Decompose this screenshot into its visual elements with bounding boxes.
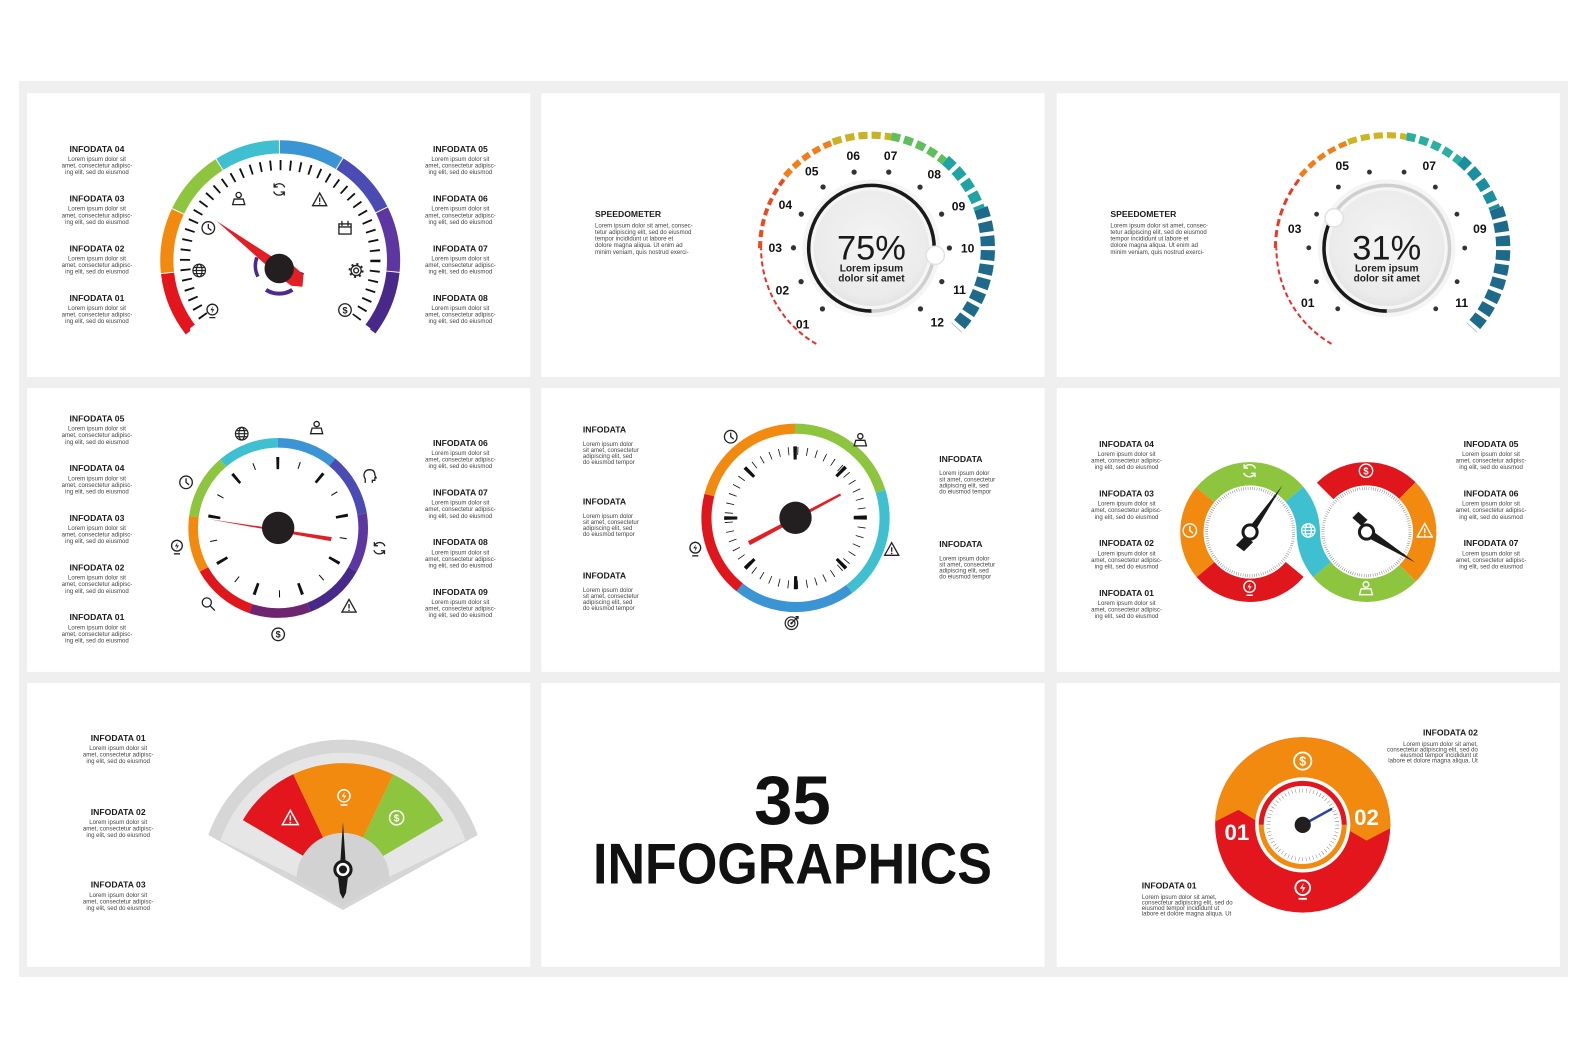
text: infodata 04: ing elit, sed do eiusmod [65,489,129,495]
text: infodata 08: Lorem ipsum dolor sit [431,550,490,556]
text: speedometer description: minim veniam, quis nostrud exerci- [595,250,689,256]
text: infodata 02: INFODATA 02 [70,563,125,573]
text: infodata 03: Lorem ipsum dolor sit [68,526,126,532]
text: infodata left 2: do eiusmod tempor [583,532,635,538]
text: infodata 03: INFODATA 03 [1099,489,1154,499]
text: infodata 01: ing elit, sed do eiusmod [86,759,150,765]
text: infodata right 1: do eiusmod tempor [939,489,991,495]
text: infodata 02: ing elit, sed do eiusmod [86,833,150,839]
text: infodata 01: eiusmod tempor incididunt ut [1142,906,1220,912]
text: infodata 08: Lorem ipsum dolor sit [431,306,490,312]
text: infodata 01: INFODATA 01 [70,293,125,303]
text: infodata 02: Lorem ipsum dolor sit [68,576,126,582]
text: infodata 02: INFODATA 02 [1423,728,1478,738]
text: infodata 08: ing elit, sed do eiusmod [429,563,492,569]
panel: title 35 infographics [541,683,1045,967]
text: infodata left 3: adipiscing elit, sed [583,600,632,606]
text: speedometer description: tetur adipiscing elit, sed do eiusmod [595,230,691,236]
text: infodata right 1: INFODATA [939,454,982,464]
dashed gradient arc [760,135,988,344]
text: infodata 06: amet, consectetur adipisc- [1456,508,1526,514]
text: infodata 05: ing elit, sed do eiusmod [1459,465,1523,471]
text: infodata 06: Lorem ipsum dolor sit [431,207,490,213]
text: infodata left 1 [583,425,639,466]
text: infodata 01: consectetur adipiscing elit, sed do [1142,900,1233,906]
panel: speedometer 31% [1057,93,1560,377]
text: infodata 01: Lorem ipsum dolor sit amet, [1142,895,1217,901]
text: speedometer description [595,209,693,256]
text: infodata 08: INFODATA 08 [433,293,488,303]
dial numbers: 03 [1288,222,1302,236]
text: speedometer description: Lorem ipsum dolor sit amet, consec- [1110,223,1208,229]
text: infodata 01 [83,733,154,765]
text: infodata left 3: do eiusmod tempor [583,606,635,612]
gauge ring [193,443,363,613]
fan gauge body [208,740,478,961]
panel: two-part circle gauge [1057,683,1560,967]
needle [216,221,303,294]
text: infodata 08: amet, consectetur adipisc- [425,313,496,319]
text: infodata right 1 [939,454,995,495]
text: infodata 07: amet, consectetur adipisc- [425,263,496,269]
text: infodata 05: Lorem ipsum dolor sit [431,157,490,163]
dial numbers [1288,159,1487,310]
text: infodata 01: ing elit, sed do eiusmod [1095,614,1158,620]
text: infodata 04: Lorem ipsum dolor sit [68,476,126,482]
panel: speedometer 75% [541,93,1045,377]
text: infodata 03: INFODATA 03 [91,880,146,890]
text: infodata 04: ing elit, sed do eiusmod [1095,465,1158,471]
text: infodata 05: Lorem ipsum dolor sit [1462,452,1520,458]
text: infodata 02 [1387,728,1478,765]
text: infodata 04 [62,144,132,176]
dial numbers: 05 [1335,159,1349,173]
text: infodata 03: Lorem ipsum dolor sit [89,893,147,899]
text: infodata left 1: INFODATA [583,425,626,435]
text: infodata 01: amet, consectetur adipisc- [62,632,132,638]
text: infodata 07: INFODATA 07 [433,488,488,498]
text: infodata right 2: INFODATA [939,539,982,549]
text: infodata 02: Lorem ipsum dolor sit [68,256,126,262]
text: infodata 06: Lorem ipsum dolor sit [1462,502,1520,508]
text: infodata right 2: Lorem ipsum dolor [939,556,989,562]
text: infodata 03 [83,880,154,912]
dial numbers: 10 [961,241,975,255]
text: infodata 03: INFODATA 03 [70,194,125,204]
text: infodata left 2: sit amet, consectetur [583,520,639,526]
text: infodata 02 [62,563,132,595]
text: infodata 04: amet, consectetur adipisc- [62,164,132,170]
title number: 35 [754,762,831,839]
text: infodata 01 [1142,881,1233,918]
dial dots [791,169,952,311]
text: infodata 04: INFODATA 04 [70,463,125,473]
icons ring [172,421,385,641]
text: infodata 02: Lorem ipsum dolor sit [89,820,147,826]
needles [1236,485,1415,562]
text: infodata 02: amet, consectetur adipisc- [83,826,154,832]
text: infodata 01: ing elit, sed do eiusmod [65,319,129,325]
text: infodata 03 [1091,489,1162,521]
text: infodata 07: amet, consectetur adipisc- [1456,558,1526,564]
text: infodata 01 [1091,588,1162,620]
panel: clock gauge infodata [541,388,1045,672]
text: infodata left 3: INFODATA [583,571,626,581]
text: infodata 06 [425,194,496,226]
text: infodata 02: INFODATA 02 [70,243,125,253]
center dial 75% [803,179,944,317]
gauge ring [706,429,885,607]
text: infodata 01: Lorem ipsum dolor sit [68,625,126,631]
panel: round clock gauge 01-09 [27,388,530,672]
text: infodata 03: ing elit, sed do eiusmod [86,906,150,912]
center dial 31%: dolor sit amet [1354,274,1421,285]
text: infodata 09: amet, consectetur adipisc- [425,607,496,613]
text: infodata right 1: Lorem ipsum dolor [939,471,989,477]
text: infodata 01: amet, consectetur adipisc- [83,752,154,758]
dial numbers [769,149,975,331]
dial numbers: 08 [927,167,941,181]
text: infodata 05: amet, consectetur adipisc- [1456,459,1526,465]
text: infodata 02: eiusmod tempor incididunt ut [1400,753,1478,759]
text: infodata 06: ing elit, sed do eiusmod [1459,515,1523,521]
text: infodata 03: ing elit, sed do eiusmod [65,220,129,226]
text: infodata 07: amet, consectetur adipisc- [425,507,496,513]
dial numbers: 11 [1455,296,1468,310]
dial numbers: 11 [953,283,966,297]
text: infodata right 1: adipiscing elit, sed [939,483,989,489]
text: infodata 05: ing elit, sed do eiusmod [65,440,129,446]
center dial 75%: dolor sit amet [838,274,905,285]
text: infodata 03: INFODATA 03 [70,513,125,523]
text: infodata 01: amet, consectetur adipisc- [1091,608,1162,614]
text: infodata 01: Lorem ipsum dolor sit [68,306,126,312]
gauge: tick marks [185,165,375,369]
text: infodata 06: INFODATA 06 [433,194,488,204]
text: infodata 05 [62,414,132,446]
dial numbers: 03 [769,241,782,255]
dial numbers: 09 [1473,222,1487,236]
text: infodata left 2 [583,497,639,538]
dial numbers: 12 [930,315,944,329]
dial numbers: 05 [805,164,819,178]
text: infodata 02: consectetur adipiscing elit, sed do [1387,747,1478,753]
text: speedometer description [1110,209,1208,256]
center dial 31% [1318,179,1456,317]
needle [207,512,332,544]
text: infodata 04: ing elit, sed do eiusmod [65,170,129,176]
text: infodata left 2: INFODATA [583,497,626,507]
circle halves [1215,737,1390,913]
text: infodata 08: INFODATA 08 [433,537,488,547]
dial numbers: 01 [1301,296,1315,310]
dial numbers: 09 [952,200,965,214]
needle [335,822,351,899]
needle [1295,809,1332,833]
text: infodata 08: ing elit, sed do eiusmod [429,319,492,325]
text: infodata 06: ing elit, sed do eiusmod [429,220,492,226]
text: infodata left 1: sit amet, consectetur [583,448,639,454]
text: infodata 05: Lorem ipsum dolor sit [68,427,126,433]
text: speedometer description: tetur adipiscing elit, sed do eiusmod [1110,230,1207,236]
dial numbers: 01 [796,317,810,331]
text: infodata 06 [1456,489,1526,521]
text: infodata 01 [62,293,132,325]
icons [1183,464,1432,595]
text: infodata 07: ing elit, sed do eiusmod [429,514,492,520]
text: infodata 05 [425,144,496,176]
text: infodata 06: amet, consectetur adipisc- [425,213,496,219]
text: infodata 09: Lorem ipsum dolor sit [431,600,490,606]
circle halves: 01 [1225,820,1249,845]
dial numbers: 07 [884,149,898,163]
text: infodata 07: Lorem ipsum dolor sit [1462,551,1520,557]
text: infodata 04 [62,463,132,495]
dial dots [1306,170,1467,311]
title text: INFOGRAPHICS [593,833,992,897]
center dial 31%: 31% [1352,229,1421,267]
text: infodata 04: INFODATA 04 [70,144,125,154]
circle halves: 02 [1354,805,1379,830]
text: infodata 04: amet, consectetur adipisc- [1091,459,1162,465]
text: infodata 08 [425,293,496,325]
text: infodata 07: ing elit, sed do eiusmod [429,270,492,276]
text: infodata left 3: sit amet, consectetur [583,594,639,600]
text: infodata 07: INFODATA 07 [1464,538,1519,548]
text: infodata 09 [425,587,496,619]
text: infodata 06: Lorem ipsum dolor sit [431,451,490,457]
text: infodata 02: ing elit, sed do eiusmod [65,270,129,276]
text: infodata 07 [1456,538,1526,570]
text: infodata 05 [1456,439,1526,471]
text: speedometer description: tempor incididunt ut labore et [1110,237,1189,243]
dial numbers: 04 [779,198,792,212]
icons [1294,752,1311,899]
dashed gradient arc [1275,135,1503,344]
text: infodata 03: amet, consectetur adipisc- [1091,508,1162,514]
text: infodata 03: ing elit, sed do eiusmod [1095,515,1158,521]
text: infodata 07: INFODATA 07 [433,243,488,253]
text: infodata 05: ing elit, sed do eiusmod [429,170,492,176]
text: speedometer description: tempor incididunt ut labore et [595,237,674,243]
text: speedometer description: minim veniam, quis nostrud exerci- [1110,250,1204,256]
text: infodata 09: ing elit, sed do eiusmod [429,613,492,619]
text: infodata 06: amet, consectetur adipisc- [425,458,496,464]
text: speedometer description: SPEEDOMETER [1110,209,1177,219]
center dial 31%: Lorem ipsum [1355,264,1418,275]
text: infodata 09: INFODATA 09 [433,587,488,597]
text: infodata 03: amet, consectetur adipisc- [62,213,132,219]
center dial 75%: Lorem ipsum [840,264,903,275]
text: infodata 03: Lorem ipsum dolor sit [68,207,126,213]
infinity ring [1192,474,1425,590]
text: infodata left 2: adipiscing elit, sed [583,526,632,532]
text: infodata 05: INFODATA 05 [433,144,488,154]
text: infodata 03: amet, consectetur adipisc- [62,533,132,539]
needle [748,493,841,545]
text: infodata right 2: do eiusmod tempor [939,575,991,581]
center dial 75%: 75% [837,229,906,267]
text: infodata left 2: Lorem ipsum dolor [583,514,633,520]
text: infodata 07 [425,243,496,276]
text: infodata 03 [62,513,132,545]
text: infodata 02: amet, consectetur adipisc- [1091,558,1162,564]
text: infodata left 1: adipiscing elit, sed [583,454,632,460]
text: infodata 02: ing elit, sed do eiusmod [1095,564,1158,570]
text: infodata 01: ing elit, sed do eiusmod [65,638,129,644]
text: infodata left 1: do eiusmod tempor [583,460,635,466]
text: infodata 02: labore et dolore magna aliqua. Ut [1388,759,1478,765]
dial numbers: 07 [1423,159,1436,173]
text: infodata 07: ing elit, sed do eiusmod [1459,564,1523,570]
text: speedometer description: dolore magna aliqua. Ut enim ad [595,243,683,249]
text: infodata 06: INFODATA 06 [1464,489,1519,499]
text: infodata left 1: Lorem ipsum dolor [583,442,633,448]
text: infodata right 1: sit amet, consectetur [939,477,995,483]
text: speedometer description: Lorem ipsum dolor sit amet, consec- [595,223,693,229]
dial ticks [1207,488,1410,576]
text: infodata 04: Lorem ipsum dolor sit [68,157,126,163]
text: infodata 02: Lorem ipsum dolor sit amet, [1403,742,1478,748]
icons [690,430,899,630]
text: infodata 03: Lorem ipsum dolor sit [1098,502,1156,508]
text: infodata 01: INFODATA 01 [1099,588,1154,598]
text: infodata 04: Lorem ipsum dolor sit [1098,452,1156,458]
text: infodata 02 [62,243,132,276]
gauge face ticks [212,462,344,594]
text: infodata 02 [83,807,154,839]
text: infodata 01: INFODATA 01 [70,612,125,622]
text: infodata 05: INFODATA 05 [70,414,125,424]
text: infodata 05: INFODATA 05 [1464,439,1519,449]
text: infodata 03: amet, consectetur adipisc- [83,899,154,905]
text: infodata 02: INFODATA 02 [91,807,146,817]
text: infodata 01 [62,612,132,644]
text: infodata 01: INFODATA 01 [91,733,146,743]
text: infodata 02: ing elit, sed do eiusmod [65,589,129,595]
text: infodata right 2: adipiscing elit, sed [939,569,989,575]
text: infodata 06 [425,438,496,470]
gauge face ticks [729,451,862,585]
text: infodata 03: ing elit, sed do eiusmod [65,539,129,545]
text: speedometer description: SPEEDOMETER [595,209,662,219]
gauge: colored ring [167,147,394,374]
text: infodata 04: INFODATA 04 [1099,439,1154,449]
text: infodata right 2: sit amet, consectetur [939,562,995,568]
text: infodata 04 [1091,439,1162,471]
text: infodata 02: amet, consectetur adipisc- [62,582,132,588]
text: infodata 02: INFODATA 02 [1099,538,1154,548]
text: infodata 01: Lorem ipsum dolor sit [1098,601,1156,607]
text: infodata left 3 [583,571,639,612]
text: infodata 08 [425,537,496,569]
icons: gauge [193,183,363,318]
text: infodata 07: Lorem ipsum dolor sit [431,256,490,262]
text: infodata 07: Lorem ipsum dolor sit [431,501,490,507]
text: infodata 08: amet, consectetur adipisc- [425,557,496,563]
dial numbers: 02 [776,283,789,297]
text: infodata 02: Lorem ipsum dolor sit [1098,551,1156,557]
text: infodata 01: amet, consectetur adipisc- [62,313,132,319]
dial numbers: 06 [846,149,860,163]
panel: infinity gauges [1057,388,1560,672]
text: infodata 06: ing elit, sed do eiusmod [429,464,492,470]
text: infodata 02: amet, consectetur adipisc- [62,263,132,269]
text: infodata right 2 [939,539,995,581]
text: infodata 04: amet, consectetur adipisc- [62,483,132,489]
text: infodata 01: labore et dolore magna aliqua. Ut [1142,912,1232,918]
icons [282,790,404,825]
text: infodata 05: amet, consectetur adipisc- [62,433,132,439]
text: infodata 07 [425,488,496,520]
text: infodata 05: amet, consectetur adipisc- [425,164,496,170]
text: infodata 01: INFODATA 01 [1142,881,1197,891]
panel: infodata speedometer 01-08 [27,93,530,377]
text: infodata left 3: Lorem ipsum dolor [583,588,633,594]
text: speedometer description: dolore magna aliqua. Ut enim ad [1110,243,1198,249]
text: infodata 01: Lorem ipsum dolor sit [89,746,147,752]
text: infodata 02 [1091,538,1162,570]
text: infodata 06: INFODATA 06 [433,438,488,448]
text: infodata 03 [62,194,132,226]
panel: fan gauge [27,683,530,967]
